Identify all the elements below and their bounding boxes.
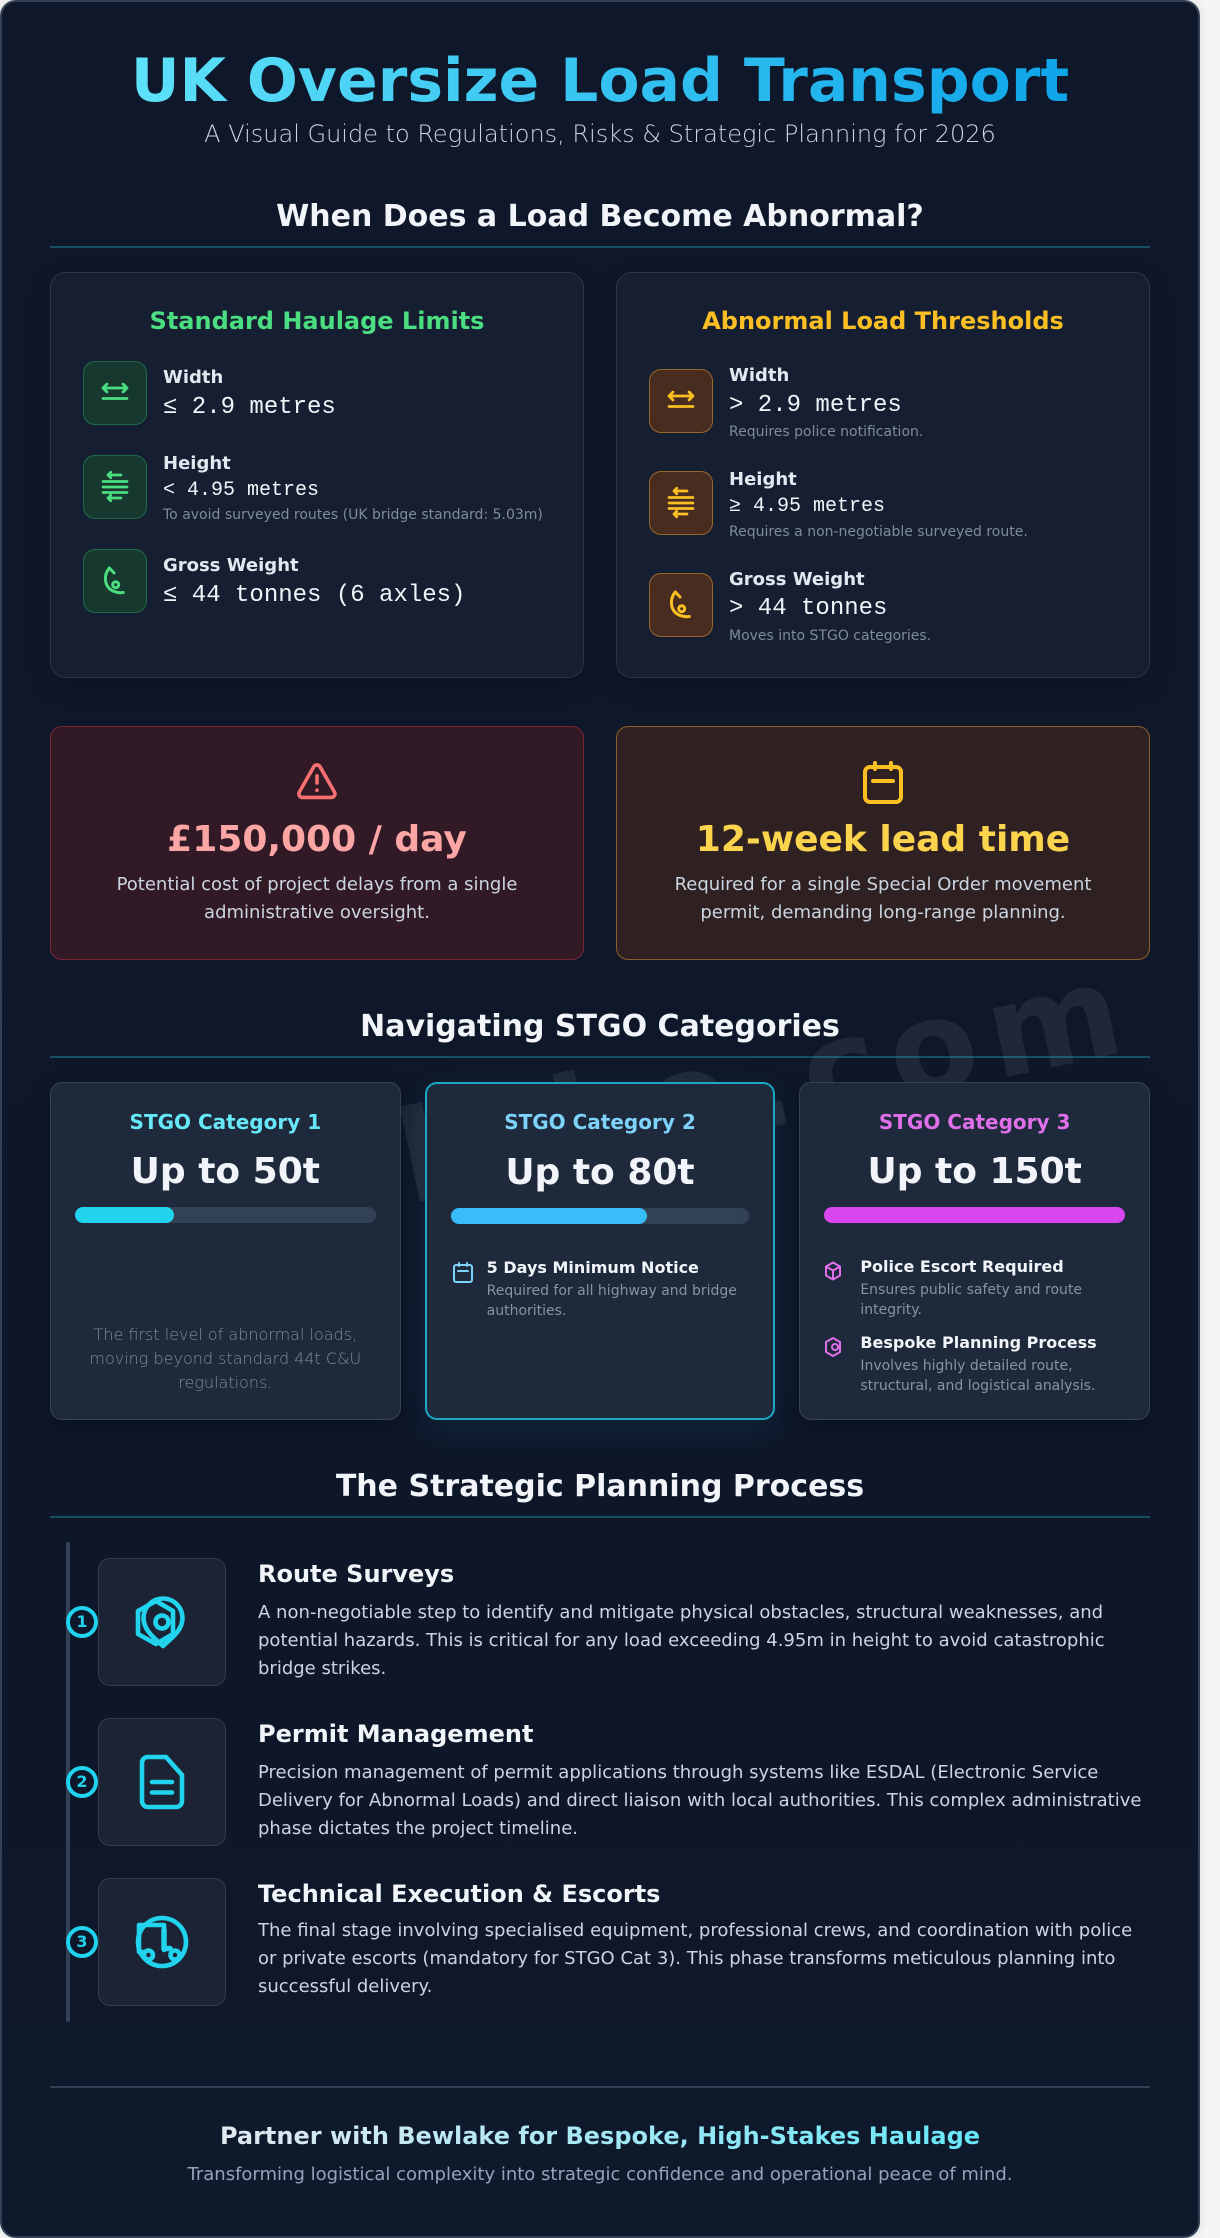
panel: standard haulage limits — [50, 272, 584, 678]
row: height limit: To avoid surveyed routes (UK bridge standard: 5.03m) — [163, 507, 543, 523]
row: gross weight threshold: Gross Weight — [729, 569, 865, 590]
subtitle: A Visual Guide to Regulations, Risks & Strategic Planning for 2026 — [204, 120, 996, 148]
heading: when does a load become abnormal: When Does a Load Become Abnormal? — [276, 199, 924, 234]
feature: notice period — [453, 1258, 737, 1318]
footer heading: Partner with Bewlake for Bespoke, High-Stakes Haulage — [220, 2122, 980, 2150]
row: width limit: Width — [163, 367, 223, 388]
step description — [258, 1602, 1105, 1678]
step description: Delivery for Abnormal Loads) and direct liaison with local authorities. This complex administrative — [258, 1790, 1141, 1810]
feature: notice period: Required for all highway and bridge — [487, 1282, 737, 1298]
title: UK Oversize Load Transport — [131, 46, 1069, 116]
row: gross weight limit: ≤ 44 tonnes (6 axles) — [163, 582, 465, 609]
step description: or private escorts (mandatory for STGO Cat 3). This phase transforms meticulous planning into — [258, 1948, 1115, 1968]
description: administrative oversight. — [204, 902, 430, 923]
step number — [66, 1766, 98, 1798]
callout: cost of delay — [50, 726, 584, 960]
row: width threshold — [649, 365, 923, 440]
statistic: 12-week lead time — [696, 819, 1070, 860]
step: route surveys — [66, 1558, 1105, 1686]
step number: 2 — [76, 1772, 88, 1791]
weight limit: Up to 80t — [505, 1152, 695, 1193]
step number — [66, 1926, 98, 1958]
feature: notice period: authorities. — [487, 1302, 566, 1318]
icon: height — [649, 471, 713, 535]
step description: Precision management of permit applications through systems like ESDAL (Electronic Service — [258, 1762, 1098, 1782]
watermark: bewlake.com — [57, 933, 1147, 1304]
icon: warning triangle — [297, 763, 337, 800]
card title: STGO Category 3 — [879, 1110, 1070, 1134]
row: gross weight threshold — [649, 569, 931, 644]
card: STGO category 3 — [799, 1082, 1150, 1420]
card: STGO category 1 — [50, 1082, 401, 1420]
footer tagline: Transforming logistical complexity into strategic confidence and operational peace of mind. — [188, 2164, 1012, 2185]
row: height threshold: Requires a non-negotiable surveyed route. — [729, 524, 1028, 540]
description — [675, 874, 1091, 923]
description: moving beyond standard 44t C&U — [89, 1349, 361, 1368]
row: height limit: < 4.95 metres — [163, 479, 319, 502]
feature: police escort: Police Escort Required — [860, 1257, 1064, 1276]
statistic: £150,000 / day — [167, 819, 467, 860]
card: STGO category 2 — [425, 1082, 775, 1420]
step description: potential hazards. This is critical for any load exceeding 4.95m in height to avoid catastrophic — [258, 1630, 1105, 1650]
card title: STGO Category 2 — [504, 1110, 696, 1134]
step title: Route Surveys — [258, 1560, 454, 1588]
icon: weight — [83, 549, 147, 613]
feature: bespoke planning: Involves highly detailed route, — [860, 1358, 1073, 1374]
step number: 3 — [76, 1932, 88, 1951]
weight limit: Up to 150t — [867, 1151, 1082, 1192]
row: width limit: ≤ 2.9 metres — [163, 394, 336, 421]
step title: Technical Execution & Escorts — [258, 1880, 660, 1908]
icon: gauge hexagon — [825, 1337, 841, 1357]
row: height threshold: Height — [729, 469, 797, 490]
row: width limit — [83, 361, 336, 425]
icon: truck in circle — [98, 1878, 226, 2006]
feature: police escort — [825, 1257, 1082, 1318]
step number: 1 — [76, 1612, 88, 1631]
row: width threshold: Width — [729, 365, 789, 386]
step description — [258, 1920, 1132, 1996]
description: Potential cost of project delays from a single — [117, 874, 517, 895]
row: height threshold: ≥ 4.95 metres — [729, 495, 885, 518]
row: gross weight threshold: Moves into STGO categories. — [729, 628, 931, 644]
step description: phase dictates the project timeline. — [258, 1818, 578, 1838]
description — [117, 874, 517, 923]
row: width threshold: Requires police notification. — [729, 424, 923, 440]
feature: notice period: 5 Days Minimum Notice — [487, 1258, 699, 1276]
icon: cube — [825, 1262, 841, 1280]
description: The first level of abnormal loads, — [94, 1325, 357, 1344]
progress bar — [451, 1208, 749, 1224]
step description: A non-negotiable step to identify and mitigate physical obstacles, structural weaknesses, and — [258, 1602, 1103, 1622]
feature: police escort: integrity. — [860, 1302, 922, 1318]
feature: police escort: Ensures public safety and route — [860, 1282, 1082, 1298]
icon: calendar — [863, 761, 903, 804]
callout: lead time — [616, 726, 1150, 960]
step description: The final stage involving specialised equipment, professional crews, and coordination with police — [258, 1920, 1132, 1940]
row: height threshold — [649, 469, 1028, 540]
panel heading: Standard Haulage Limits — [150, 307, 484, 335]
progress bar — [824, 1207, 1125, 1223]
timeline rail — [66, 1542, 70, 2022]
row: height limit — [83, 453, 543, 523]
heading: strategic planning process: The Strategic Planning Process — [336, 1469, 864, 1504]
heading: navigating STGO categories: Navigating STGO Categories — [360, 1009, 840, 1044]
icon: document — [98, 1718, 226, 1846]
card title: STGO Category 1 — [130, 1110, 321, 1134]
step description: bridge strikes. — [258, 1658, 386, 1678]
step number — [66, 1606, 98, 1638]
row: gross weight limit — [83, 549, 465, 613]
row: gross weight limit: Gross Weight — [163, 555, 299, 576]
description: permit, demanding long-range planning. — [700, 902, 1066, 923]
row: gross weight threshold: > 44 tonnes — [729, 595, 887, 622]
description: regulations. — [178, 1373, 272, 1392]
step: permit management — [66, 1718, 1141, 1846]
progress bar — [75, 1207, 376, 1223]
icon: width — [649, 369, 713, 433]
icon: route pin — [98, 1558, 226, 1686]
step title: Permit Management — [258, 1720, 533, 1748]
weight limit: Up to 50t — [131, 1151, 320, 1192]
icon: weight — [649, 573, 713, 637]
panel: abnormal load thresholds — [616, 272, 1150, 678]
row: width threshold: > 2.9 metres — [729, 392, 902, 419]
panel heading: Abnormal Load Thresholds — [702, 307, 1064, 335]
icon: width — [83, 361, 147, 425]
description: Required for a single Special Order movement — [675, 874, 1091, 895]
icon: height — [83, 455, 147, 519]
timeline: planning steps — [66, 1542, 1141, 2022]
feature: bespoke planning — [825, 1333, 1097, 1394]
step description — [258, 1762, 1141, 1838]
row: height limit: Height — [163, 453, 231, 474]
step description: successful delivery. — [258, 1976, 432, 1996]
icon: calendar — [453, 1262, 473, 1283]
feature: bespoke planning: structural, and logistical analysis. — [860, 1378, 1095, 1394]
feature: bespoke planning: Bespoke Planning Process — [860, 1333, 1097, 1352]
description — [89, 1325, 361, 1392]
step: technical execution — [66, 1878, 1132, 2006]
